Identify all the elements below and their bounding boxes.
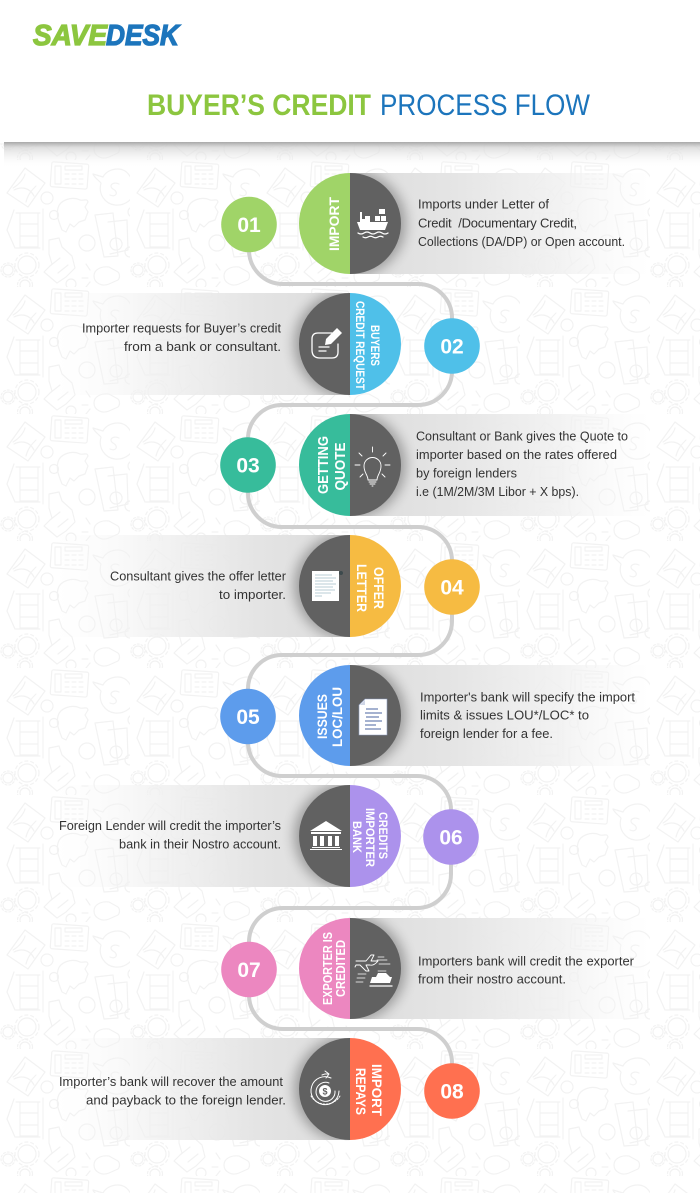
number 05 — [220, 689, 276, 744]
step 04 — [110, 534, 480, 638]
step 08 — [59, 1037, 480, 1141]
number 06 — [423, 809, 479, 865]
label: offer letter: LETTER — [354, 564, 370, 612]
icon: plane and ship — [355, 955, 392, 986]
icon: bank building — [310, 821, 342, 850]
label: buyers credit request — [353, 301, 380, 390]
logo: DESK — [106, 20, 181, 52]
description 02 — [82, 320, 281, 354]
label: import repays: REPAYS — [353, 1068, 369, 1115]
number 07 — [221, 942, 277, 997]
description 05: limits & issues LOU*/LOC* to — [420, 708, 589, 722]
description 05 — [420, 690, 635, 741]
label: import repays — [353, 1064, 385, 1116]
description 04: to importer. — [219, 587, 286, 602]
number 08 — [424, 1063, 480, 1119]
number 07: 07 — [237, 959, 261, 982]
logo: SAVE — [33, 20, 109, 52]
number 03 — [220, 437, 276, 493]
number 04 — [424, 559, 480, 615]
label: offer letter — [354, 564, 387, 612]
number 03: 03 — [236, 454, 260, 478]
icon: LOC document — [359, 699, 387, 735]
label: exporter is credited — [320, 932, 348, 1005]
number 01: 01 — [237, 214, 261, 237]
description 02: from a bank or consultant. — [124, 339, 281, 354]
step 07 — [221, 916, 635, 1020]
number 08: 08 — [440, 1080, 464, 1104]
label: credits importer bank: IMPORTER — [363, 808, 377, 867]
description 01 — [418, 196, 625, 249]
description 04: Consultant gives the offer letter — [110, 568, 287, 584]
icon: dollar cycle — [311, 1071, 340, 1105]
label: buyers credit request: BUYERS — [368, 325, 380, 366]
label: getting quote — [316, 436, 349, 494]
grey row bars — [40, 173, 700, 1140]
label: issues loc/lou: LOC/LOU — [329, 687, 345, 747]
description 08: and payback to the foreign lender. — [86, 1092, 286, 1108]
label: credits importer bank: CREDITS — [376, 812, 390, 859]
description 06: Foreign Lender will credit the importer’s — [59, 818, 281, 833]
description 02: Importer requests for Buyer’s credit — [82, 320, 281, 336]
description 04 — [110, 568, 287, 602]
description 01: Collections (DA/DP) or Open account. — [418, 234, 625, 249]
header band — [0, 0, 700, 168]
description 03: Consultant or Bank gives the Quote to — [416, 429, 628, 444]
description 06 — [59, 818, 281, 852]
number 01 — [221, 197, 277, 252]
icon: offer document — [312, 571, 343, 601]
description 05: Importer's bank will specify the import — [420, 690, 635, 704]
title — [147, 89, 591, 122]
number 04: 04 — [440, 576, 464, 600]
number 05: 05 — [236, 706, 260, 729]
icon: dollar cycle: $ — [322, 1086, 328, 1096]
icon: light bulb — [355, 447, 390, 486]
number 06: 06 — [439, 826, 463, 850]
label: import: IMPORT — [326, 197, 342, 251]
label: issues loc/lou: ISSUES — [314, 694, 330, 739]
title: BUYER’S CREDIT — [147, 89, 371, 122]
step 06 — [59, 784, 479, 888]
label: buyers credit request: CREDIT REQUEST — [353, 301, 365, 390]
step 05 — [220, 664, 635, 768]
logo — [33, 20, 181, 52]
title: PROCESS FLOW — [380, 89, 591, 122]
label: import repays: IMPORT — [369, 1064, 385, 1116]
label: getting quote: GETTING — [316, 436, 332, 494]
label: exporter is credited: EXPORTER IS — [320, 932, 335, 1005]
description 07 — [418, 954, 635, 986]
description 05: foreign lender for a fee. — [420, 726, 553, 741]
label: credits importer bank — [350, 808, 390, 867]
description 01: Credit /Documentary Credit, — [418, 216, 577, 230]
icon: cargo ship — [357, 209, 388, 238]
description 01: Imports under Letter of — [418, 196, 549, 212]
step 02 — [82, 292, 480, 396]
label: exporter is credited: CREDITED — [333, 940, 348, 997]
description 08 — [59, 1074, 286, 1108]
description 07: from their nostro account. — [418, 972, 566, 986]
description 03: i.e (1M/2M/3M Libor + X bps). — [416, 484, 579, 499]
label: offer letter: OFFER — [371, 567, 387, 609]
description 03: importer based on the rates offered — [416, 447, 617, 462]
description 03: by foreign lenders — [416, 466, 517, 480]
label: issues loc/lou — [314, 687, 345, 747]
description 06: bank in their Nostro account. — [119, 836, 281, 852]
step 03 — [220, 413, 628, 517]
description 07: Importers bank will credit the exporter — [418, 954, 635, 968]
step 01 — [221, 172, 625, 276]
label: getting quote: QUOTE — [333, 442, 349, 490]
number 02 — [424, 318, 480, 374]
label: credits importer bank: BANK — [350, 821, 364, 853]
number 02: 02 — [440, 336, 464, 358]
description 03 — [416, 429, 628, 499]
icon: note and pencil — [312, 328, 342, 358]
connector path — [248, 224, 452, 1091]
description 08: Importer’s bank will recover the amount — [59, 1074, 283, 1089]
